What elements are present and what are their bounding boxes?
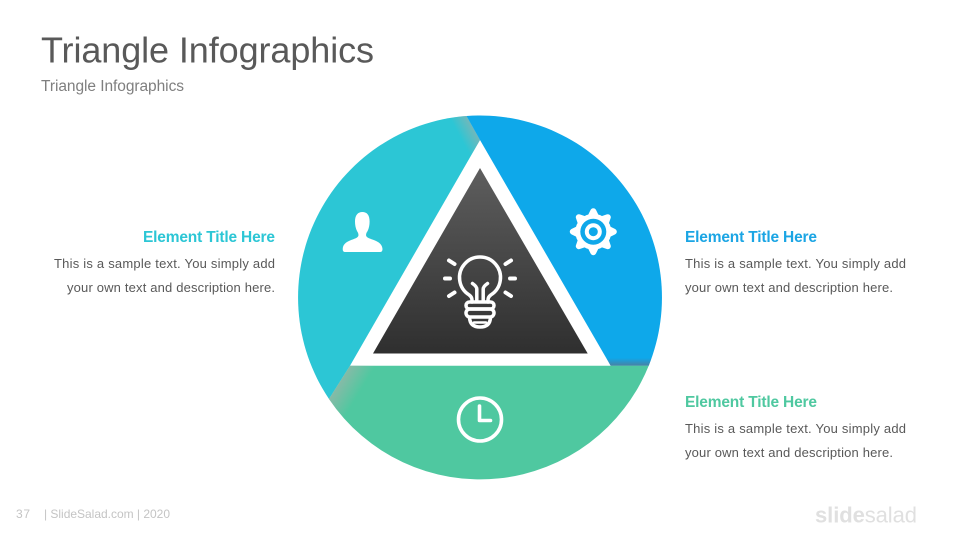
footer: page number and credit: 37 [16, 507, 30, 521]
icon: gear [573, 211, 614, 252]
footer: page number and credit: | SlideSalad.com | 2020 [44, 507, 170, 521]
title: Triangle Infographics [41, 30, 374, 70]
text block: right blue: your own text and description here. [685, 280, 893, 295]
text block: right blue: Element Title Here [685, 229, 817, 246]
segment: blue [466, 116, 662, 366]
subtitle: Triangle Infographics [41, 78, 184, 95]
icon: clock [458, 398, 502, 441]
segment: teal [298, 116, 480, 399]
text block: left teal [54, 229, 275, 295]
text block: left teal: your own text and description here. [67, 280, 275, 295]
icon: person [343, 212, 382, 252]
text block: right green: your own text and description here. [685, 445, 893, 460]
text block: left teal: This is a sample text. You simply add [54, 256, 275, 271]
segment: green [329, 366, 649, 479]
text block: right blue: This is a sample text. You simply add [685, 256, 906, 271]
text block: left teal: Element Title Here [143, 229, 275, 246]
logo: slidesalad: slidesalad [815, 502, 917, 528]
circular triangle diagram [298, 116, 662, 479]
icon: light bulb [445, 257, 515, 327]
text block: right green: This is a sample text. You simply add [685, 421, 906, 436]
text block: right blue [685, 229, 906, 295]
central dark triangle [373, 168, 588, 354]
text block: right green [685, 394, 906, 460]
text block: right green: Element Title Here [685, 394, 817, 411]
